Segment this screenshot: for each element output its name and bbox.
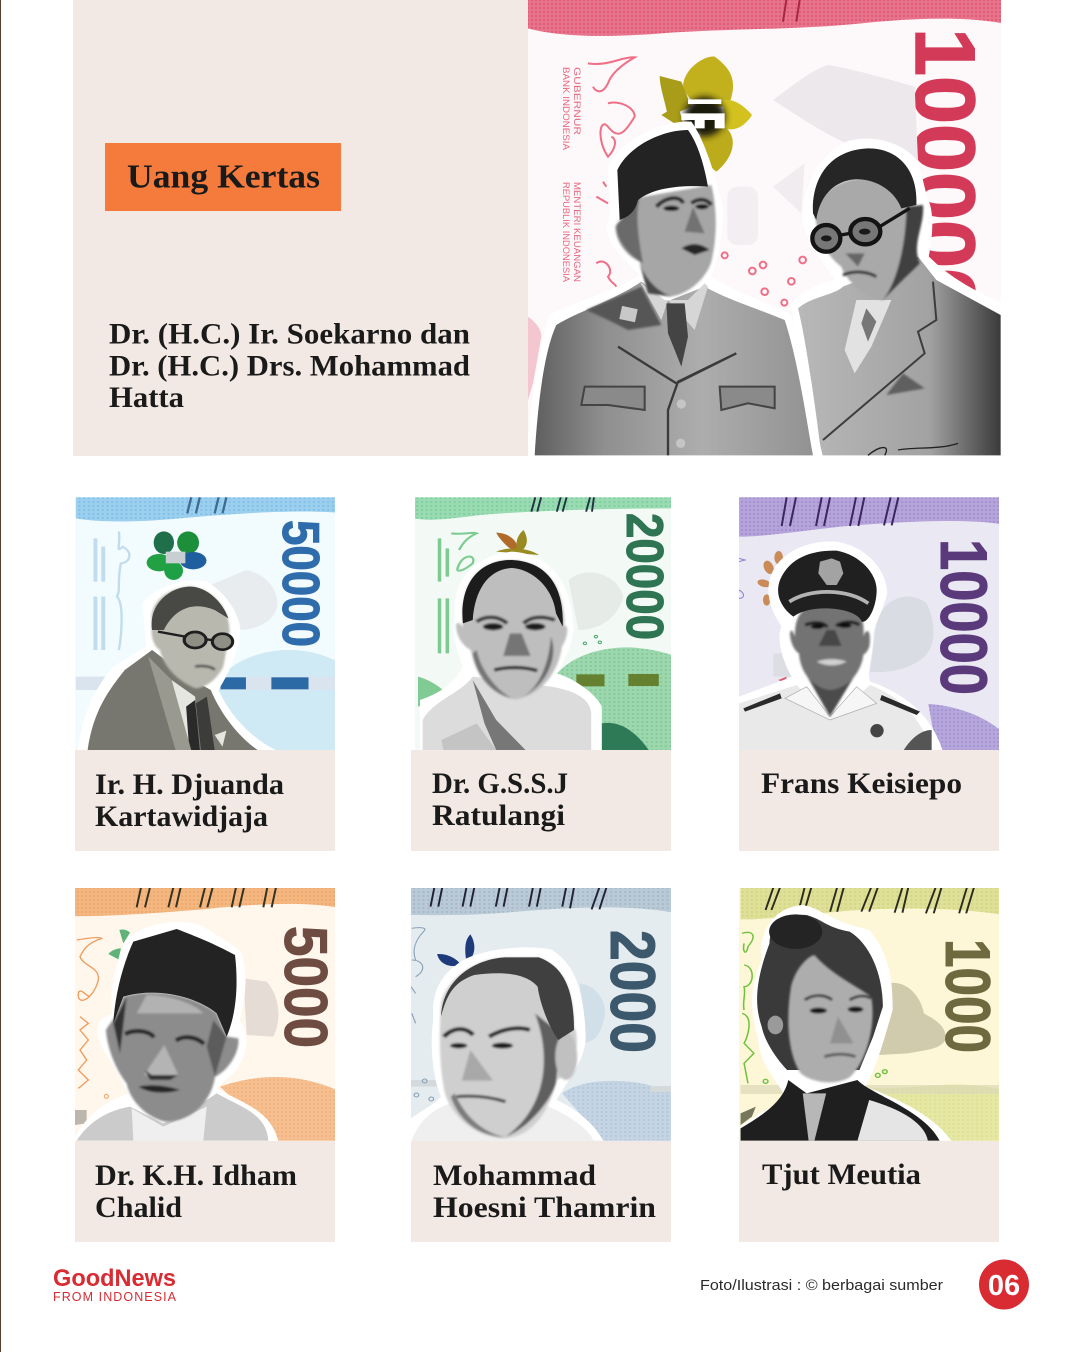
panel: Idham Chalid 5000 bbox=[75, 887, 339, 1242]
panel: Tjut Meutia 1000 bbox=[739, 887, 1004, 1242]
signature captions: REPUBLIK INDONESIA bbox=[561, 182, 571, 282]
denomination numeral: 2000 bbox=[597, 930, 667, 1053]
name: Dr. K.H. Idham Chalid bbox=[95, 1159, 297, 1224]
banknote 50000 bbox=[75, 497, 335, 750]
denomination numeral: 100000 bbox=[898, 28, 992, 316]
portrait: Mohammad Hatta bbox=[791, 139, 1005, 457]
portrait: Tjut Meutia bbox=[741, 905, 951, 1141]
portrait: Frans Keisiepo bbox=[739, 541, 943, 751]
footer logo: GoodNews from Indonesia: GoodNews bbox=[53, 1265, 176, 1292]
banknote 10000 bbox=[739, 497, 1001, 751]
hero background panel bbox=[73, 0, 1001, 456]
caption box bbox=[75, 1141, 335, 1242]
icon: leaves bbox=[496, 530, 539, 555]
banknote 5000 bbox=[75, 887, 339, 1141]
hero name text: Dr. (H.C.) Drs. Mohammad bbox=[109, 350, 470, 382]
heading: Uang Kertas bbox=[105, 143, 341, 211]
hero name text: Dr. (H.C.) Ir. Soekarno dan bbox=[109, 318, 470, 350]
banknote 1000 bbox=[739, 887, 1004, 1141]
signature captions: BANK INDONESIA bbox=[561, 67, 571, 150]
denomination numeral: 1000 bbox=[932, 939, 1002, 1053]
caption box bbox=[411, 1141, 671, 1242]
name: Dr. G.S.S.J Ratulangi: Dr. G.S.S.J bbox=[432, 767, 568, 800]
signature on photo bbox=[868, 443, 958, 455]
signature captions bbox=[563, 68, 580, 282]
name: Mohammad Hoesni Thamrin: Hoesni Thamrin bbox=[433, 1191, 656, 1224]
name: Dr. K.H. Idham Chalid: Dr. K.H. Idham bbox=[95, 1159, 297, 1192]
name: Ir. H. Djuanda Kartawidjaja bbox=[95, 768, 284, 833]
portrait: Hoesni Thamrin bbox=[411, 947, 603, 1141]
denomination numeral: 20000 bbox=[615, 513, 673, 640]
panel: Djuanda 50000 bbox=[75, 497, 335, 851]
panel: hero bbox=[73, 0, 1005, 457]
caption box bbox=[75, 750, 335, 851]
hero banknote 100000 with portraits bbox=[526, 0, 1005, 457]
page number badge bbox=[979, 1260, 1029, 1310]
name: Tjut Meutia: Tjut Meutia bbox=[762, 1158, 921, 1191]
caption box bbox=[411, 750, 671, 851]
panel: Frans Keisiepo 10000 bbox=[739, 497, 1001, 851]
name: Mohammad Hoesni Thamrin: Mohammad bbox=[433, 1159, 596, 1192]
portrait: Ratulangi bbox=[420, 552, 602, 751]
portrait: Idham Chalid bbox=[75, 922, 278, 1141]
name: Dr. G.S.S.J Ratulangi: Ratulangi bbox=[432, 799, 565, 832]
name: Frans Keisiepo: Frans Keisiepo bbox=[761, 767, 962, 800]
signature captions: GUBERNUR bbox=[572, 67, 582, 136]
icon: green flower bbox=[147, 531, 206, 580]
name: Ir. H. Djuanda Kartawidjaja: Ir. H. Djuanda bbox=[95, 768, 284, 801]
hero name text bbox=[109, 318, 470, 414]
page edge line bbox=[0, 0, 1, 1352]
banknote 20000 bbox=[414, 497, 676, 751]
caption box bbox=[739, 750, 999, 851]
name: Ir. H. Djuanda Kartawidjaja: Kartawidjaja bbox=[95, 800, 268, 833]
name: Dr. G.S.S.J Ratulangi bbox=[432, 767, 568, 832]
panel: Hoesni Thamrin 2000 bbox=[411, 887, 674, 1242]
portrait: Djuanda bbox=[78, 580, 277, 751]
caption box bbox=[739, 1141, 999, 1242]
footer logo: GoodNews from Indonesia: FROM INDONESIA bbox=[53, 1290, 177, 1304]
signature captions: MENTERI KEUANGAN bbox=[572, 182, 582, 282]
footer logo: GoodNews from Indonesia bbox=[53, 1265, 177, 1304]
icon: yellow flower bbox=[660, 57, 752, 172]
panel: Ratulangi 20000 bbox=[411, 497, 676, 851]
portrait: Soekarno bbox=[526, 122, 823, 457]
page number badge: 06 bbox=[988, 1270, 1020, 1302]
hero name text: Hatta bbox=[109, 381, 184, 414]
denomination numeral: 10000 bbox=[927, 539, 1001, 695]
name: Dr. K.H. Idham Chalid: Chalid bbox=[95, 1191, 182, 1224]
denomination numeral: 50000 bbox=[271, 520, 329, 647]
name: Mohammad Hoesni Thamrin bbox=[433, 1159, 656, 1224]
denomination numeral: 5000 bbox=[272, 926, 339, 1048]
banknote 2000 bbox=[411, 887, 674, 1141]
heading: Uang Kertas: Uang Kertas bbox=[127, 158, 320, 196]
photo credit: Foto/Ilustrasi : © berbagai sumber bbox=[700, 1277, 943, 1294]
